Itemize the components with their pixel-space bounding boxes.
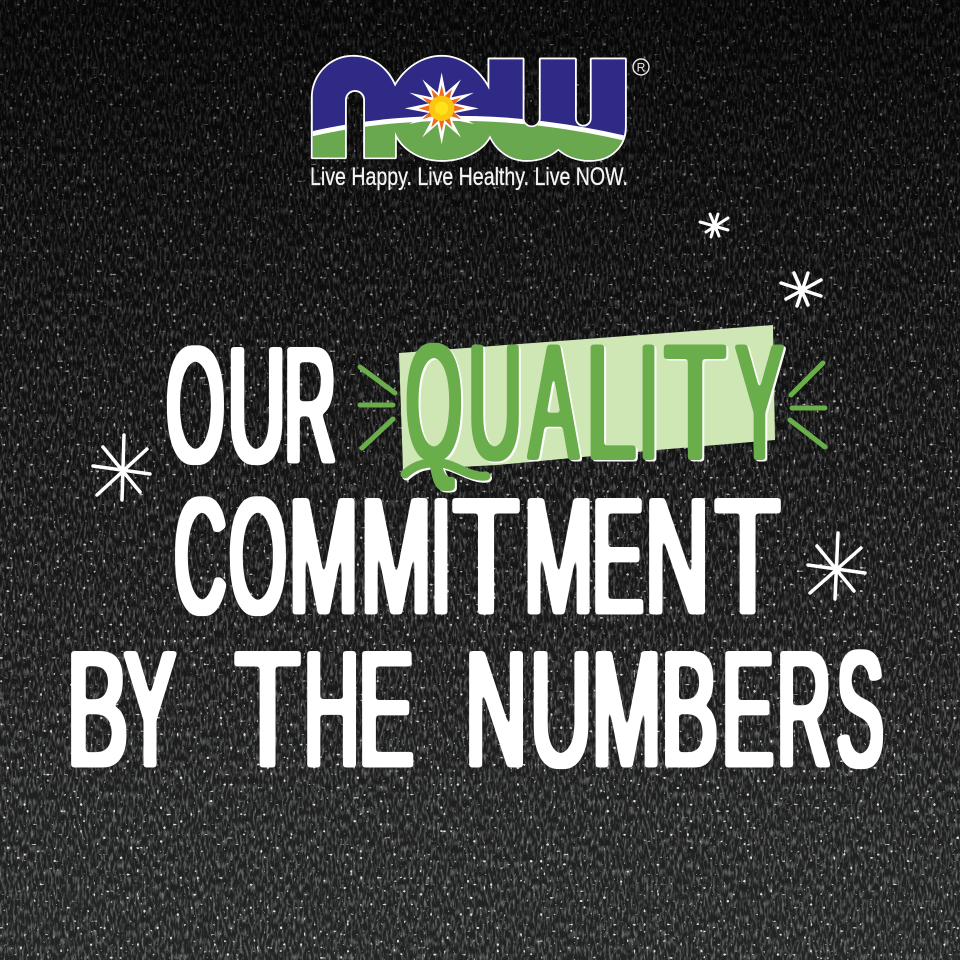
heading line: BY THE NUMBERS: E <box>722 617 774 801</box>
heading line: BY THE NUMBERS: H <box>304 617 359 801</box>
green rays left of QUALITY <box>360 367 395 448</box>
heading word: QUALITY: U <box>470 312 524 496</box>
heading word: QUALITY: A <box>529 310 578 494</box>
heading word: QUALITY: Q <box>406 310 462 494</box>
heading word: QUALITY: I <box>640 312 661 496</box>
heading line: BY THE NUMBERS: N <box>465 617 527 801</box>
heading line: COMMITMENT: N <box>645 464 709 648</box>
heading word: QUALITY: U <box>468 310 522 494</box>
heading line: COMMITMENT: M <box>289 464 358 648</box>
heading word: QUALITY: Q <box>408 312 464 496</box>
heading line: COMMITMENT: T <box>453 464 519 648</box>
green rays right of QUALITY <box>790 363 825 447</box>
heading word: QUALITY: L <box>588 312 638 496</box>
registered trademark mark: R <box>637 60 646 74</box>
heading word: QUALITY: T <box>664 310 726 494</box>
registered trademark mark <box>633 59 649 75</box>
text: S <box>837 617 883 801</box>
heading word: OUR: U <box>228 313 286 497</box>
heading line: COMMITMENT: E <box>592 464 644 648</box>
icon: small asterisk sparkle top <box>700 214 728 237</box>
heading word: QUALITY <box>405 310 785 496</box>
heading line: COMMITMENT: I <box>431 464 451 648</box>
text: Y <box>738 312 785 496</box>
heading line: BY THE NUMBERS: B <box>66 617 128 801</box>
text: R <box>284 313 336 497</box>
highlight patch behind QUALITY <box>399 325 775 470</box>
heading line: COMMITMENT: M <box>524 464 594 648</box>
heading line: COMMITMENT: C <box>174 464 226 648</box>
heading word: QUALITY: A <box>531 312 580 496</box>
icon: asterisk sparkle upper right <box>781 273 821 306</box>
heading line: BY THE NUMBERS: T <box>235 617 300 801</box>
icon: asterisk sparkle left <box>93 435 150 500</box>
heading word: OUR: O <box>166 313 225 497</box>
heading line: BY THE NUMBERS: B <box>661 617 718 801</box>
heading line: BY THE NUMBERS: Y <box>125 617 176 801</box>
heading line: BY THE NUMBERS: M <box>592 617 662 801</box>
heading word: QUALITY: L <box>586 310 636 494</box>
logo: NOW brand mark <box>307 53 630 167</box>
heading line: BY THE NUMBERS: R <box>777 617 831 801</box>
heading word: QUALITY: I <box>638 310 659 494</box>
heading line: BY THE NUMBERS: E <box>358 617 414 801</box>
heading line: COMMITMENT: T <box>715 464 780 648</box>
heading word: QUALITY: T <box>666 312 728 496</box>
heading line: COMMITMENT: M <box>361 464 432 648</box>
logo tagline: Live Happy. Live Healthy. Live NOW. <box>310 163 628 191</box>
heading line: BY THE NUMBERS: U <box>530 617 592 801</box>
heading line: COMMITMENT: O <box>229 464 286 648</box>
icon: asterisk sparkle right <box>808 533 865 599</box>
text: Y <box>736 310 783 494</box>
